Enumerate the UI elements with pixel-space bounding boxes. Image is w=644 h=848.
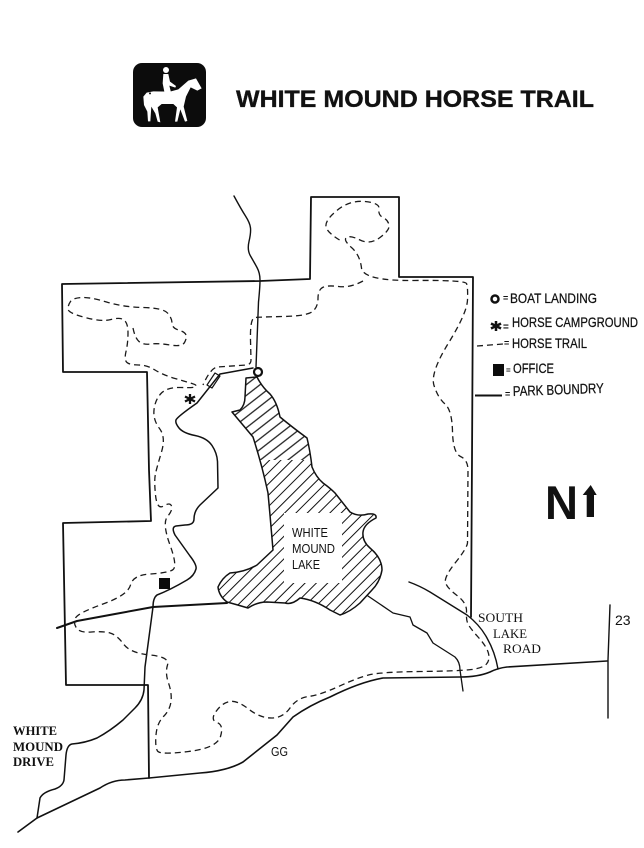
north marker: N xyxy=(545,476,578,529)
icon: horse campground xyxy=(185,394,195,404)
icon: horse and rider xyxy=(133,63,206,127)
legend: horse trail: HORSE TRAIL xyxy=(512,335,587,351)
title: WHITE MOUND HORSE TRAIL xyxy=(236,86,594,113)
outlet stream xyxy=(368,596,463,691)
label: White Mound Drive: WHITE xyxy=(13,724,57,738)
legend: horse campground: = xyxy=(503,322,509,333)
north marker xyxy=(545,476,597,529)
label: White Mound Drive: DRIVE xyxy=(13,755,54,769)
park boundary xyxy=(62,197,473,778)
legend: park boundary: PARK BOUNDRY xyxy=(513,380,605,399)
label: GG: GG xyxy=(271,744,288,759)
legend xyxy=(475,290,638,399)
lake label: MOUND xyxy=(292,541,335,556)
east-west road xyxy=(57,603,227,628)
legend: office xyxy=(493,360,554,376)
river north of lake xyxy=(234,196,260,367)
label: South Lake Road xyxy=(478,610,541,656)
legend: horse campground xyxy=(491,314,638,333)
South Lake Road xyxy=(409,582,498,669)
label: South Lake Road: LAKE xyxy=(493,626,527,641)
label: White Mound Drive: MOUND xyxy=(13,740,63,754)
small dock rectangle xyxy=(207,373,220,388)
legend: horse trail xyxy=(477,335,587,351)
label: South Lake Road: SOUTH xyxy=(478,610,523,625)
label: South Lake Road: ROAD xyxy=(503,641,541,656)
horse trail xyxy=(68,201,489,753)
legend: horse trail: = xyxy=(504,338,509,348)
icon: boat landing xyxy=(254,368,262,376)
legend: park boundary: = xyxy=(505,389,510,399)
legend: park boundary xyxy=(475,380,605,399)
road GG xyxy=(18,661,607,832)
highway 23 xyxy=(608,605,610,718)
label: highway 23: 23 xyxy=(615,612,631,628)
legend: boat landing: = xyxy=(503,293,508,303)
north arrow xyxy=(583,485,597,517)
lake label: LAKE xyxy=(292,557,320,572)
label: White Mound Drive xyxy=(13,724,63,769)
lake xyxy=(217,376,383,616)
icon: office xyxy=(159,578,170,589)
creek and White Mound Drive xyxy=(37,368,253,818)
lake label xyxy=(292,525,335,572)
legend: office: = xyxy=(506,366,511,375)
legend: office: OFFICE xyxy=(513,360,554,376)
lake label: WHITE xyxy=(292,525,328,540)
legend: boat landing: BOAT LANDING xyxy=(510,290,597,306)
